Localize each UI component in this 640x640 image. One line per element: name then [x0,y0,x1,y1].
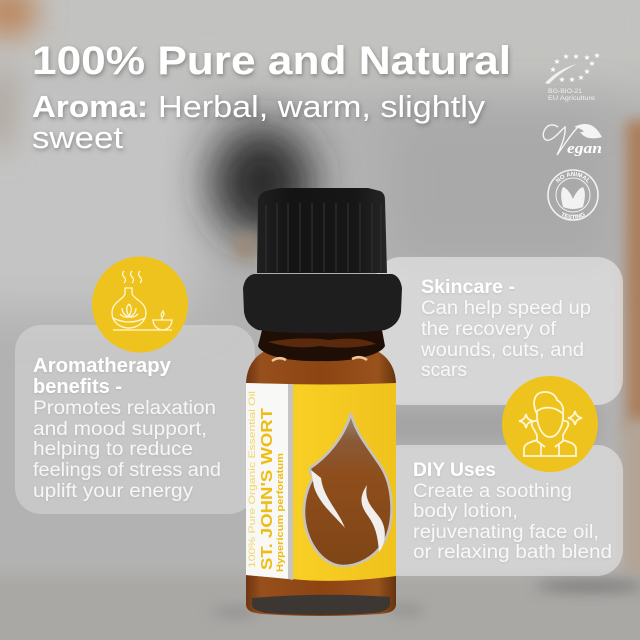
icon: EU organic leaf: ★ [594,51,601,60]
icon: EU organic leaf: ★ [554,57,561,66]
text block: aromatherapy: Promotes relaxation [33,398,216,419]
label text: 100% Pure Organic Essential Oil [247,391,257,568]
text block: aromatherapy: feelings of stress and [33,460,221,481]
icon: aromatherapy diffuser [92,256,188,352]
text block: DIY uses [413,460,612,563]
icon: no animal testing [547,169,599,221]
text block: DIY uses: or relaxing bath blend [413,542,612,563]
bottle neck [258,330,385,361]
text block: DIY uses: body lotion, [413,501,518,522]
panel: DIY uses [375,445,623,576]
text block: aromatherapy [33,355,221,502]
aroma line: sweet [32,120,123,155]
text block: aromatherapy: uplift your energy [33,481,194,502]
label white strip [246,383,288,579]
text block: skincare: wounds, cuts, and [420,340,584,361]
bottle [243,188,402,616]
icon: EU organic leaf: ★ [584,53,591,62]
icon: vegan mark [543,124,602,157]
bottle body [246,348,396,616]
neck highlights [272,357,367,361]
text block: skincare: the recovery of [421,319,557,340]
bottle base shadow [252,595,390,615]
text block: skincare: Skincare - [421,277,515,298]
cap ribs [266,203,381,272]
icon: EU organic leaf: EU Agriculture [548,95,595,102]
text block: DIY uses: Create a soothing [413,481,572,502]
text block: aromatherapy: helping to reduce [33,439,193,460]
EU label: BG-BIO-21 [548,88,582,95]
label [246,383,396,581]
label text: Hypericum perforatum [275,453,286,572]
icon: EU organic leaf [545,51,601,102]
icon: EU organic leaf: ★ [559,75,566,84]
text block: aromatherapy: Aromatherapy [33,355,172,377]
icon: EU organic leaf: ★ [569,75,576,84]
label text [247,391,286,572]
text block: DIY uses: DIY Uses [413,460,496,481]
icon: vegan mark: egan [567,141,602,157]
label text: ST. JOHN'S WORT [259,408,276,570]
text block: skincare [420,277,591,381]
text block: DIY uses: rejuvenating face oil, [413,522,599,543]
title: 100% Pure and Natural [32,39,511,83]
text block: aromatherapy: and mood support, [33,419,207,440]
icon: EU organic leaf: ★ [573,52,580,61]
text block: skincare: Can help speed up [421,298,591,319]
panel: skincare [375,257,623,405]
aroma line: Herbal, warm, slightly [158,89,486,124]
icon: EU organic leaf: ★ [584,67,591,76]
icon: oil drop [304,413,392,566]
text block: aromatherapy: benefits - [33,376,122,398]
icon: EU organic leaf: ★ [563,52,570,61]
aroma line: Aroma: [32,89,148,124]
icon: no animal testing: NO ANIMAL [556,172,590,183]
icon: EU organic leaf: ★ [578,73,585,82]
panel: aromatherapy benefits [15,325,255,514]
icon: skincare face [502,376,598,472]
cap top [257,188,387,273]
icon: EU organic leaf: ★ [589,59,596,68]
icon: EU organic leaf: ★ [550,65,557,74]
icon: no animal testing: TESTING [562,212,585,219]
cap skirt [243,274,402,333]
aroma line [32,89,486,155]
text block: skincare: scars [421,360,467,381]
